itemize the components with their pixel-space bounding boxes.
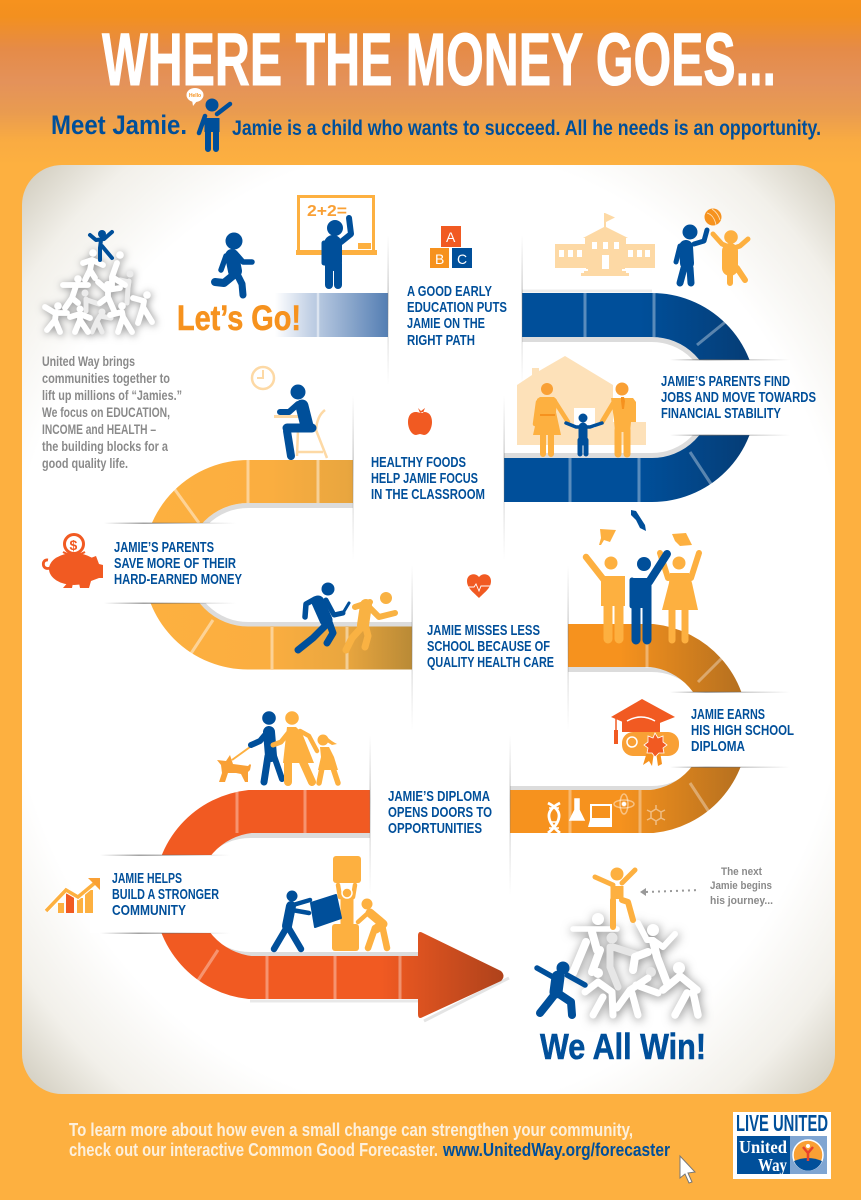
text: parents save money — [114, 539, 242, 588]
text: good early education: A GOOD EARLY — [407, 283, 492, 300]
logo: live united: United — [739, 1137, 787, 1157]
text: good early education: JAMIE ON THE — [407, 315, 485, 332]
text: helps community: COMMUNITY — [112, 902, 186, 919]
text: misses less school: QUALITY HEALTH CARE — [427, 654, 554, 671]
text: good early education: RIGHT PATH — [407, 332, 475, 349]
header gradient background — [0, 0, 861, 165]
icon: piggy bank with coin: $ — [70, 537, 78, 553]
icon: thrown graduation caps — [599, 510, 692, 546]
icon: student at desk — [274, 384, 327, 458]
heading: let's go: Let’s Go! — [177, 299, 301, 338]
icon: alphabet blocks: B — [435, 251, 444, 267]
pathway: light orange road — [165, 460, 412, 669]
pathway: dark orange road — [510, 624, 726, 833]
text: parents find jobs: JAMIE’S PARENTS FIND — [661, 373, 790, 390]
arrow: dotted pointer to next jamie — [640, 888, 700, 896]
footer text — [69, 1120, 670, 1160]
icon: jamie waving with hello bubble: Hello — [189, 93, 201, 99]
icon: alphabet blocks — [430, 226, 472, 268]
icon: piggy bank with coin — [43, 534, 103, 588]
text: united way intro: INCOME and HEALTH – — [42, 421, 156, 437]
icon: children playing with ball — [676, 208, 748, 283]
text: united way intro — [42, 353, 182, 471]
text: good early education: EDUCATION PUTS — [407, 299, 507, 316]
text: united way intro: We focus on EDUCATION, — [42, 404, 170, 420]
text: helps community: BUILD A STRONGER — [112, 886, 219, 903]
icon: apple — [408, 408, 432, 435]
icon: clock — [252, 367, 274, 389]
text: parents save money: JAMIE’S PARENTS — [114, 539, 214, 556]
text: parents find jobs — [661, 373, 816, 422]
text: healthy foods: HELP JAMIE FOCUS — [371, 470, 478, 487]
icon: relay runners — [298, 582, 395, 650]
text: misses less school: SCHOOL BECAUSE OF — [427, 638, 550, 655]
text: healthy foods — [371, 454, 485, 503]
text: diploma opens doors — [388, 788, 492, 837]
text: helps community: JAMIE HELPS — [112, 870, 182, 887]
icons: science symbols on road — [548, 794, 665, 833]
illustration: house with jamie's family — [517, 356, 646, 454]
text: earns diploma — [691, 706, 794, 755]
icon: family walking dog — [217, 711, 338, 783]
icon: teacher writing — [324, 218, 351, 285]
text: the next jamie note: Jamie begins — [710, 880, 772, 892]
icon: chalkboard with sum: 2+2= — [307, 203, 347, 220]
text: misses less school: JAMIE MISSES LESS — [427, 622, 540, 639]
icon: chalkboard with sum — [296, 196, 377, 255]
text: united way intro: lift up millions of “Jamies.” — [42, 387, 182, 403]
text: united way intro: the building blocks for a — [42, 438, 168, 454]
meet jamie heading: Meet Jamie. — [51, 110, 187, 140]
panel: white journey panel — [22, 165, 835, 1094]
pathway: red road with arrow — [176, 790, 509, 1021]
illustration: graduates cheering — [586, 553, 699, 640]
text: diploma opens doors: OPPORTUNITIES — [388, 820, 482, 837]
icon: heart with pulse — [467, 574, 491, 598]
icon: jamie waving with hello bubble — [186, 88, 230, 149]
icon: graduation cap and diploma — [611, 699, 679, 766]
text: diploma opens doors: OPENS DOORS TO — [388, 804, 492, 821]
text: parents find jobs: FINANCIAL STABILITY — [661, 405, 781, 422]
icon: running child — [215, 232, 252, 295]
icon: cursor arrow — [680, 1156, 695, 1183]
footer text: check out our interactive Common Good Forecaster. — [69, 1140, 438, 1160]
text: parents find jobs: JOBS AND MOVE TOWARDS — [661, 389, 816, 406]
footer text: www.UnitedWay.org/forecaster — [442, 1140, 670, 1160]
pathway: let's go fade and blue road — [275, 291, 734, 502]
text: earns diploma: DIPLOMA — [691, 738, 745, 755]
text: earns diploma: HIS HIGH SCHOOL — [691, 722, 794, 739]
text: the next jamie note: The next — [721, 866, 762, 878]
logo: live united — [733, 1110, 831, 1179]
icon: alphabet blocks: A — [446, 229, 456, 245]
illustration: left people pyramid — [45, 230, 152, 332]
icon: growth chart — [46, 878, 100, 913]
heading: we all win: We All Win! — [540, 1026, 706, 1067]
text: healthy foods: IN THE CLASSROOM — [371, 486, 485, 503]
text: parents save money: HARD-EARNED MONEY — [114, 571, 242, 588]
logo: live united: Way — [758, 1155, 787, 1175]
text: healthy foods: HEALTHY FOODS — [371, 454, 466, 471]
illustration: bottom people pyramid — [537, 868, 698, 1015]
icon: alphabet blocks: C — [457, 251, 467, 267]
text: earns diploma: JAMIE EARNS — [691, 706, 765, 723]
text: the next jamie note: his journey... — [710, 895, 773, 907]
text: united way intro: United Way brings — [42, 353, 135, 369]
text: diploma opens doors: JAMIE’S DIPLOMA — [388, 788, 490, 805]
icon: school building — [555, 213, 655, 276]
text: good early education — [407, 283, 507, 349]
text: the next jamie note — [710, 866, 773, 907]
text: helps community — [112, 870, 219, 919]
text: united way intro: good quality life. — [42, 455, 128, 471]
text: misses less school — [427, 622, 554, 671]
text: united way intro: communities together to — [42, 370, 170, 386]
illustration: builders stacking blocks — [274, 856, 387, 951]
callout: white bands and boxes over road — [90, 235, 790, 934]
text: parents save money: SAVE MORE OF THEIR — [114, 555, 236, 572]
footer text: To learn more about how even a small change can strengthen your community, — [69, 1120, 633, 1140]
